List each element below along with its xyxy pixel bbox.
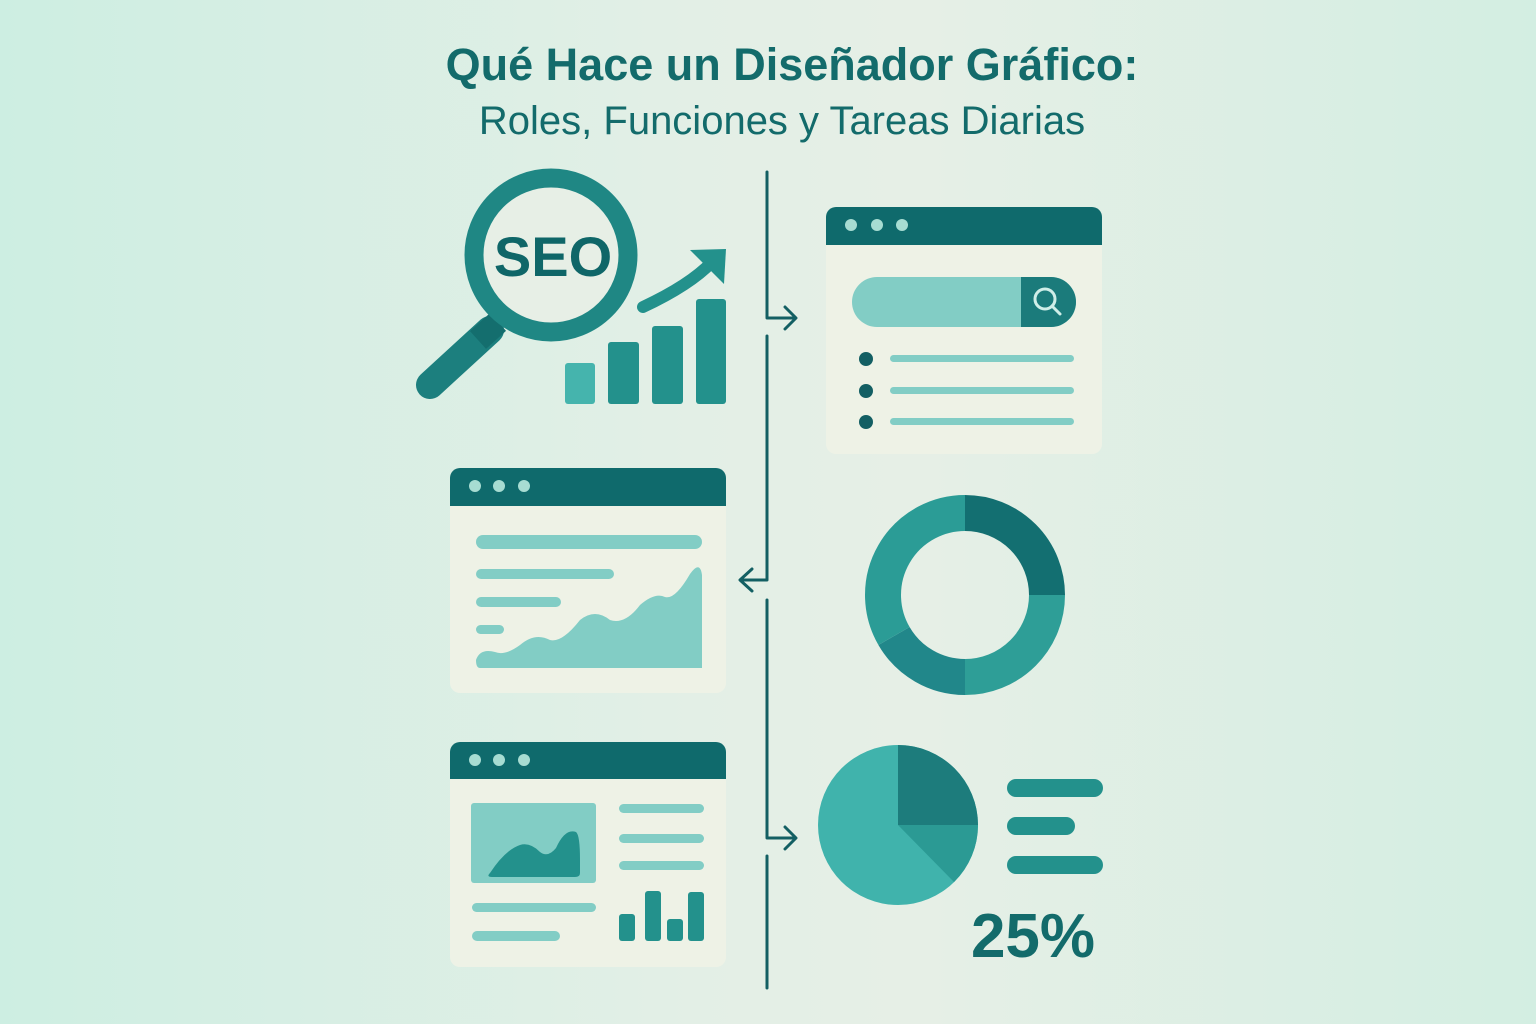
subtitle: Roles, Funciones y Tareas Diarias: [479, 99, 1085, 143]
title: Qué Hace un Diseñador Gráfico:: [446, 39, 1138, 90]
chart: pie with legend: [818, 745, 1103, 971]
icon: SEO magnifier with growth chart: SEO: [494, 225, 612, 288]
window: area chart: [450, 468, 726, 693]
title: [446, 39, 1138, 143]
timeline with arrows: [740, 172, 796, 988]
window: search results: [826, 207, 1102, 454]
icon: SEO magnifier with growth chart: [430, 178, 726, 404]
text: 25%: 25%: [971, 902, 1095, 971]
window: dashboard: [450, 742, 726, 967]
chart: donut: [883, 513, 1047, 677]
